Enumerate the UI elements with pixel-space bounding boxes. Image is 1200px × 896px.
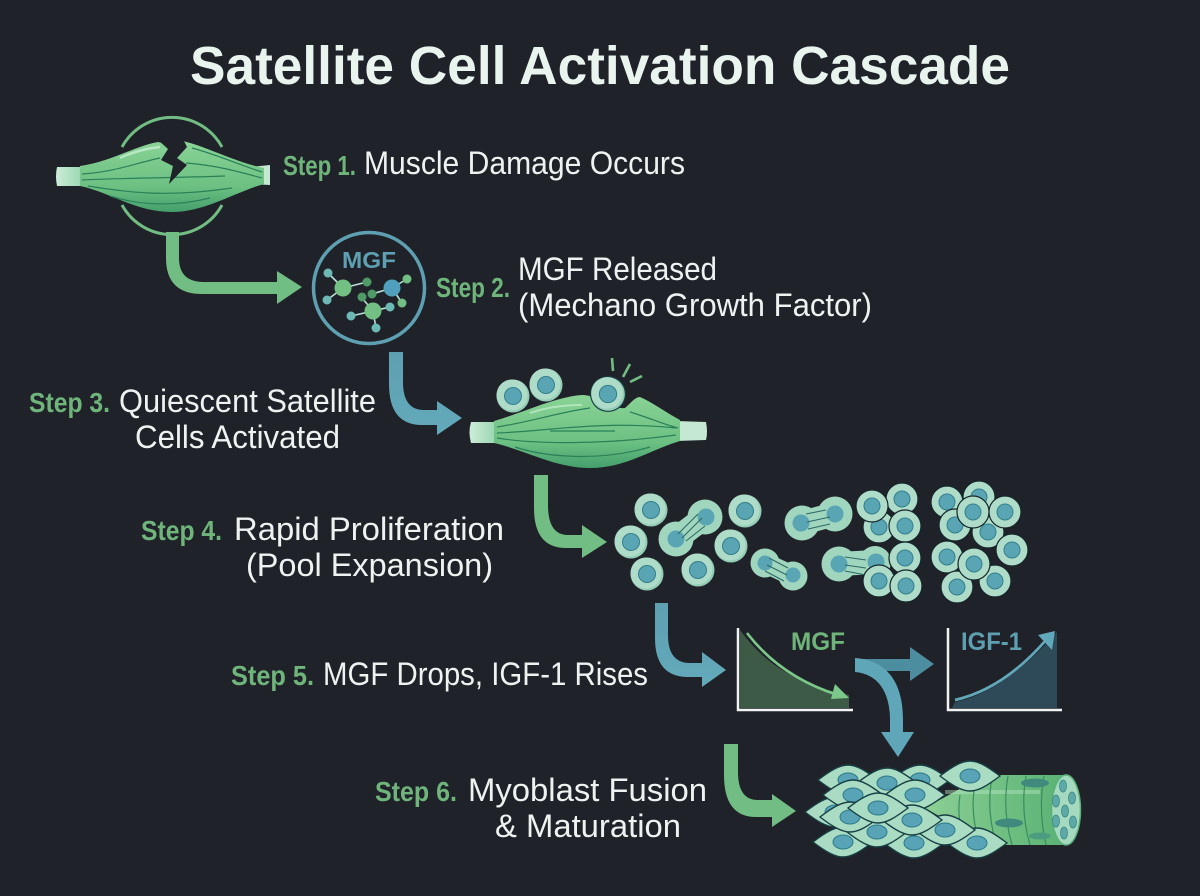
arrow: fusion to fibre: [724, 744, 796, 827]
step 1 label: Step 1.: [283, 150, 356, 181]
icon: MGF molecule circle: [314, 232, 424, 344]
step 3 label: Quiescent Satellite: [119, 383, 376, 419]
arrow: proliferation to growth factor charts: [655, 603, 726, 687]
step 4 label: (Pool Expansion): [246, 547, 493, 583]
fibre end cap: [1052, 775, 1080, 845]
cluster right: [931, 481, 1028, 603]
icon: damaged muscle: [56, 117, 270, 235]
step 6 label: [375, 772, 707, 844]
curve arrowhead: [831, 684, 849, 699]
proliferating cell pool: [614, 481, 1028, 603]
step 6 label: & Maturation: [495, 808, 681, 844]
arrow: MGF to satellite cells: [389, 352, 462, 435]
arrow: branch to IGF-1: [860, 647, 934, 681]
dividing cell: [658, 500, 722, 556]
arrow: activation to proliferation: [534, 475, 607, 558]
step 6 label: Myoblast Fusion: [468, 772, 707, 808]
step 4 label: [141, 511, 504, 583]
step 2 label: (Mechano Growth Factor): [518, 287, 872, 323]
title: Satellite Cell Activation Cascade: [190, 36, 1010, 96]
step 2 label: [436, 251, 872, 323]
cluster lower middle: [822, 542, 922, 602]
arrow: branch to fibre: [855, 658, 914, 757]
step 1 label: Muscle Damage Occurs: [364, 145, 685, 181]
MGF icon label: MGF: [342, 247, 396, 273]
step 4 label: Step 4.: [141, 515, 222, 546]
step 4 label: Rapid Proliferation: [234, 511, 504, 547]
dividing cell: [784, 496, 852, 540]
arrow: damage to MGF: [166, 232, 302, 304]
cylinder: [925, 775, 1066, 845]
MGF chart label: MGF: [791, 628, 845, 656]
myoblast cells: [805, 761, 1007, 858]
satellite cells: [496, 368, 626, 412]
chart: MGF decline: [738, 628, 853, 710]
curve arrowhead: [1038, 631, 1055, 650]
icon: fused muscle fibre: [805, 761, 1080, 858]
IGF-1 chart label: IGF-1: [961, 628, 1022, 656]
step 2 label: Step 2.: [436, 272, 510, 303]
step 3 label: Step 3.: [29, 387, 110, 418]
step 5 label: Step 5.: [231, 660, 314, 691]
step 3 label: [29, 383, 376, 455]
icon: muscle with satellite cells: [470, 358, 707, 468]
step 6 label: Step 6.: [375, 776, 457, 807]
step 2 label: MGF Released: [518, 251, 717, 287]
step 3 label: Cells Activated: [135, 419, 340, 455]
icon: lightning crack: [158, 139, 187, 184]
cluster upper middle: [856, 483, 921, 543]
step 5 label: MGF Drops, IGF-1 Rises: [323, 656, 648, 692]
activation sparks: [612, 358, 642, 382]
dividing cell: [750, 548, 808, 590]
chart: IGF-1 rise: [948, 628, 1062, 710]
molecule network: [322, 268, 412, 332]
